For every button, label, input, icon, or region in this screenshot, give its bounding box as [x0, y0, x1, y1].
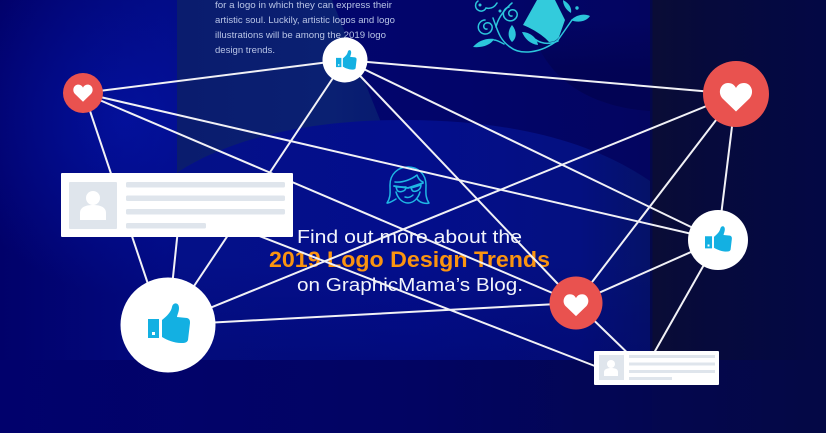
text placeholders [629, 355, 715, 380]
paragraph text: artistic soul. Luckily, artistic logos and logo [215, 15, 395, 26]
artistic logo illustration [473, 0, 590, 52]
node: large thumbs up [120, 278, 216, 372]
node: right thumbs up [688, 210, 748, 270]
node: large heart [703, 61, 769, 127]
heading line 3: on GraphicMama’s Blog. [297, 274, 523, 295]
background panel: blog page [177, 0, 650, 360]
node: top thumbs up [322, 38, 368, 82]
heading line 2: 2019 Logo Design Trends [269, 247, 550, 272]
profile card: left [61, 173, 293, 237]
node: small heart [63, 73, 103, 113]
avatar [599, 355, 624, 380]
heading line 1: Find out more about the [297, 226, 522, 247]
paragraph text: illustrations will be among the 2019 logo [215, 30, 386, 41]
node: middle heart [550, 276, 602, 330]
text placeholders [126, 182, 285, 228]
profile card: bottom right [594, 351, 719, 385]
paragraph text: for a logo in which they can express their [215, 0, 392, 11]
icon: woman with glasses [387, 167, 429, 203]
paragraph text: design trends. [215, 45, 275, 56]
headline [269, 226, 550, 295]
avatar [69, 182, 117, 229]
paragraph text [215, 0, 395, 56]
network connection lines [83, 60, 736, 368]
